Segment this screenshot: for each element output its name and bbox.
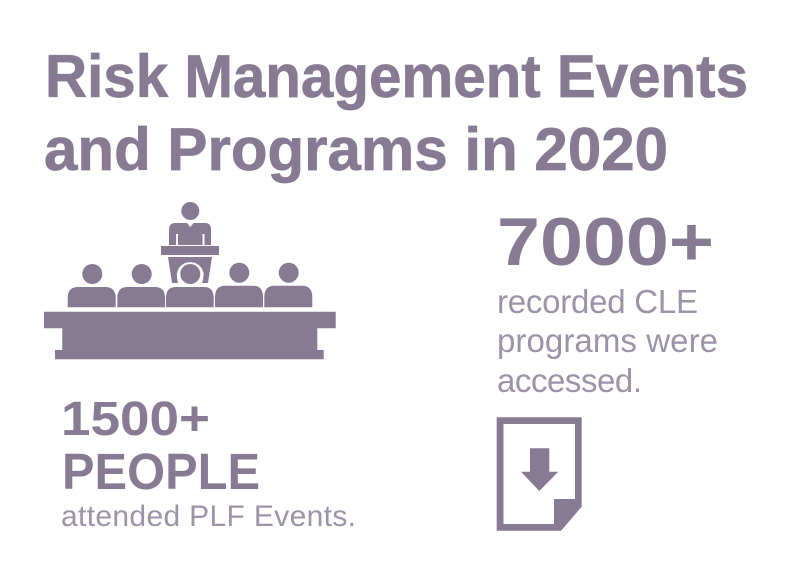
- speaker: [169, 202, 211, 245]
- stat: 7000+ recorded programs: programs were: [497, 322, 718, 359]
- title: Risk Management Events: [45, 43, 748, 110]
- table: [44, 312, 336, 359]
- audience heads: [82, 263, 299, 284]
- podium: [161, 246, 219, 283]
- stat: 1500+ people: PEOPLE: [62, 443, 260, 500]
- stat: 1500+ people: [61, 393, 356, 533]
- stat: 7000+ recorded programs: [497, 204, 718, 399]
- icon: speaker at podium with audience at table: [44, 202, 336, 359]
- title: [44, 43, 748, 183]
- stat: 7000+ recorded programs: accessed.: [497, 362, 642, 399]
- icon: document download: [497, 417, 582, 531]
- stat: 1500+ people: attended PLF Events.: [61, 500, 356, 533]
- stat: 7000+ recorded programs: 7000+: [497, 204, 714, 280]
- audience bodies: [68, 286, 312, 307]
- stat: 1500+ people: 1500+: [61, 393, 210, 446]
- stat: 7000+ recorded programs: recorded CLE: [497, 283, 698, 320]
- title: and Programs in 2020: [44, 116, 668, 183]
